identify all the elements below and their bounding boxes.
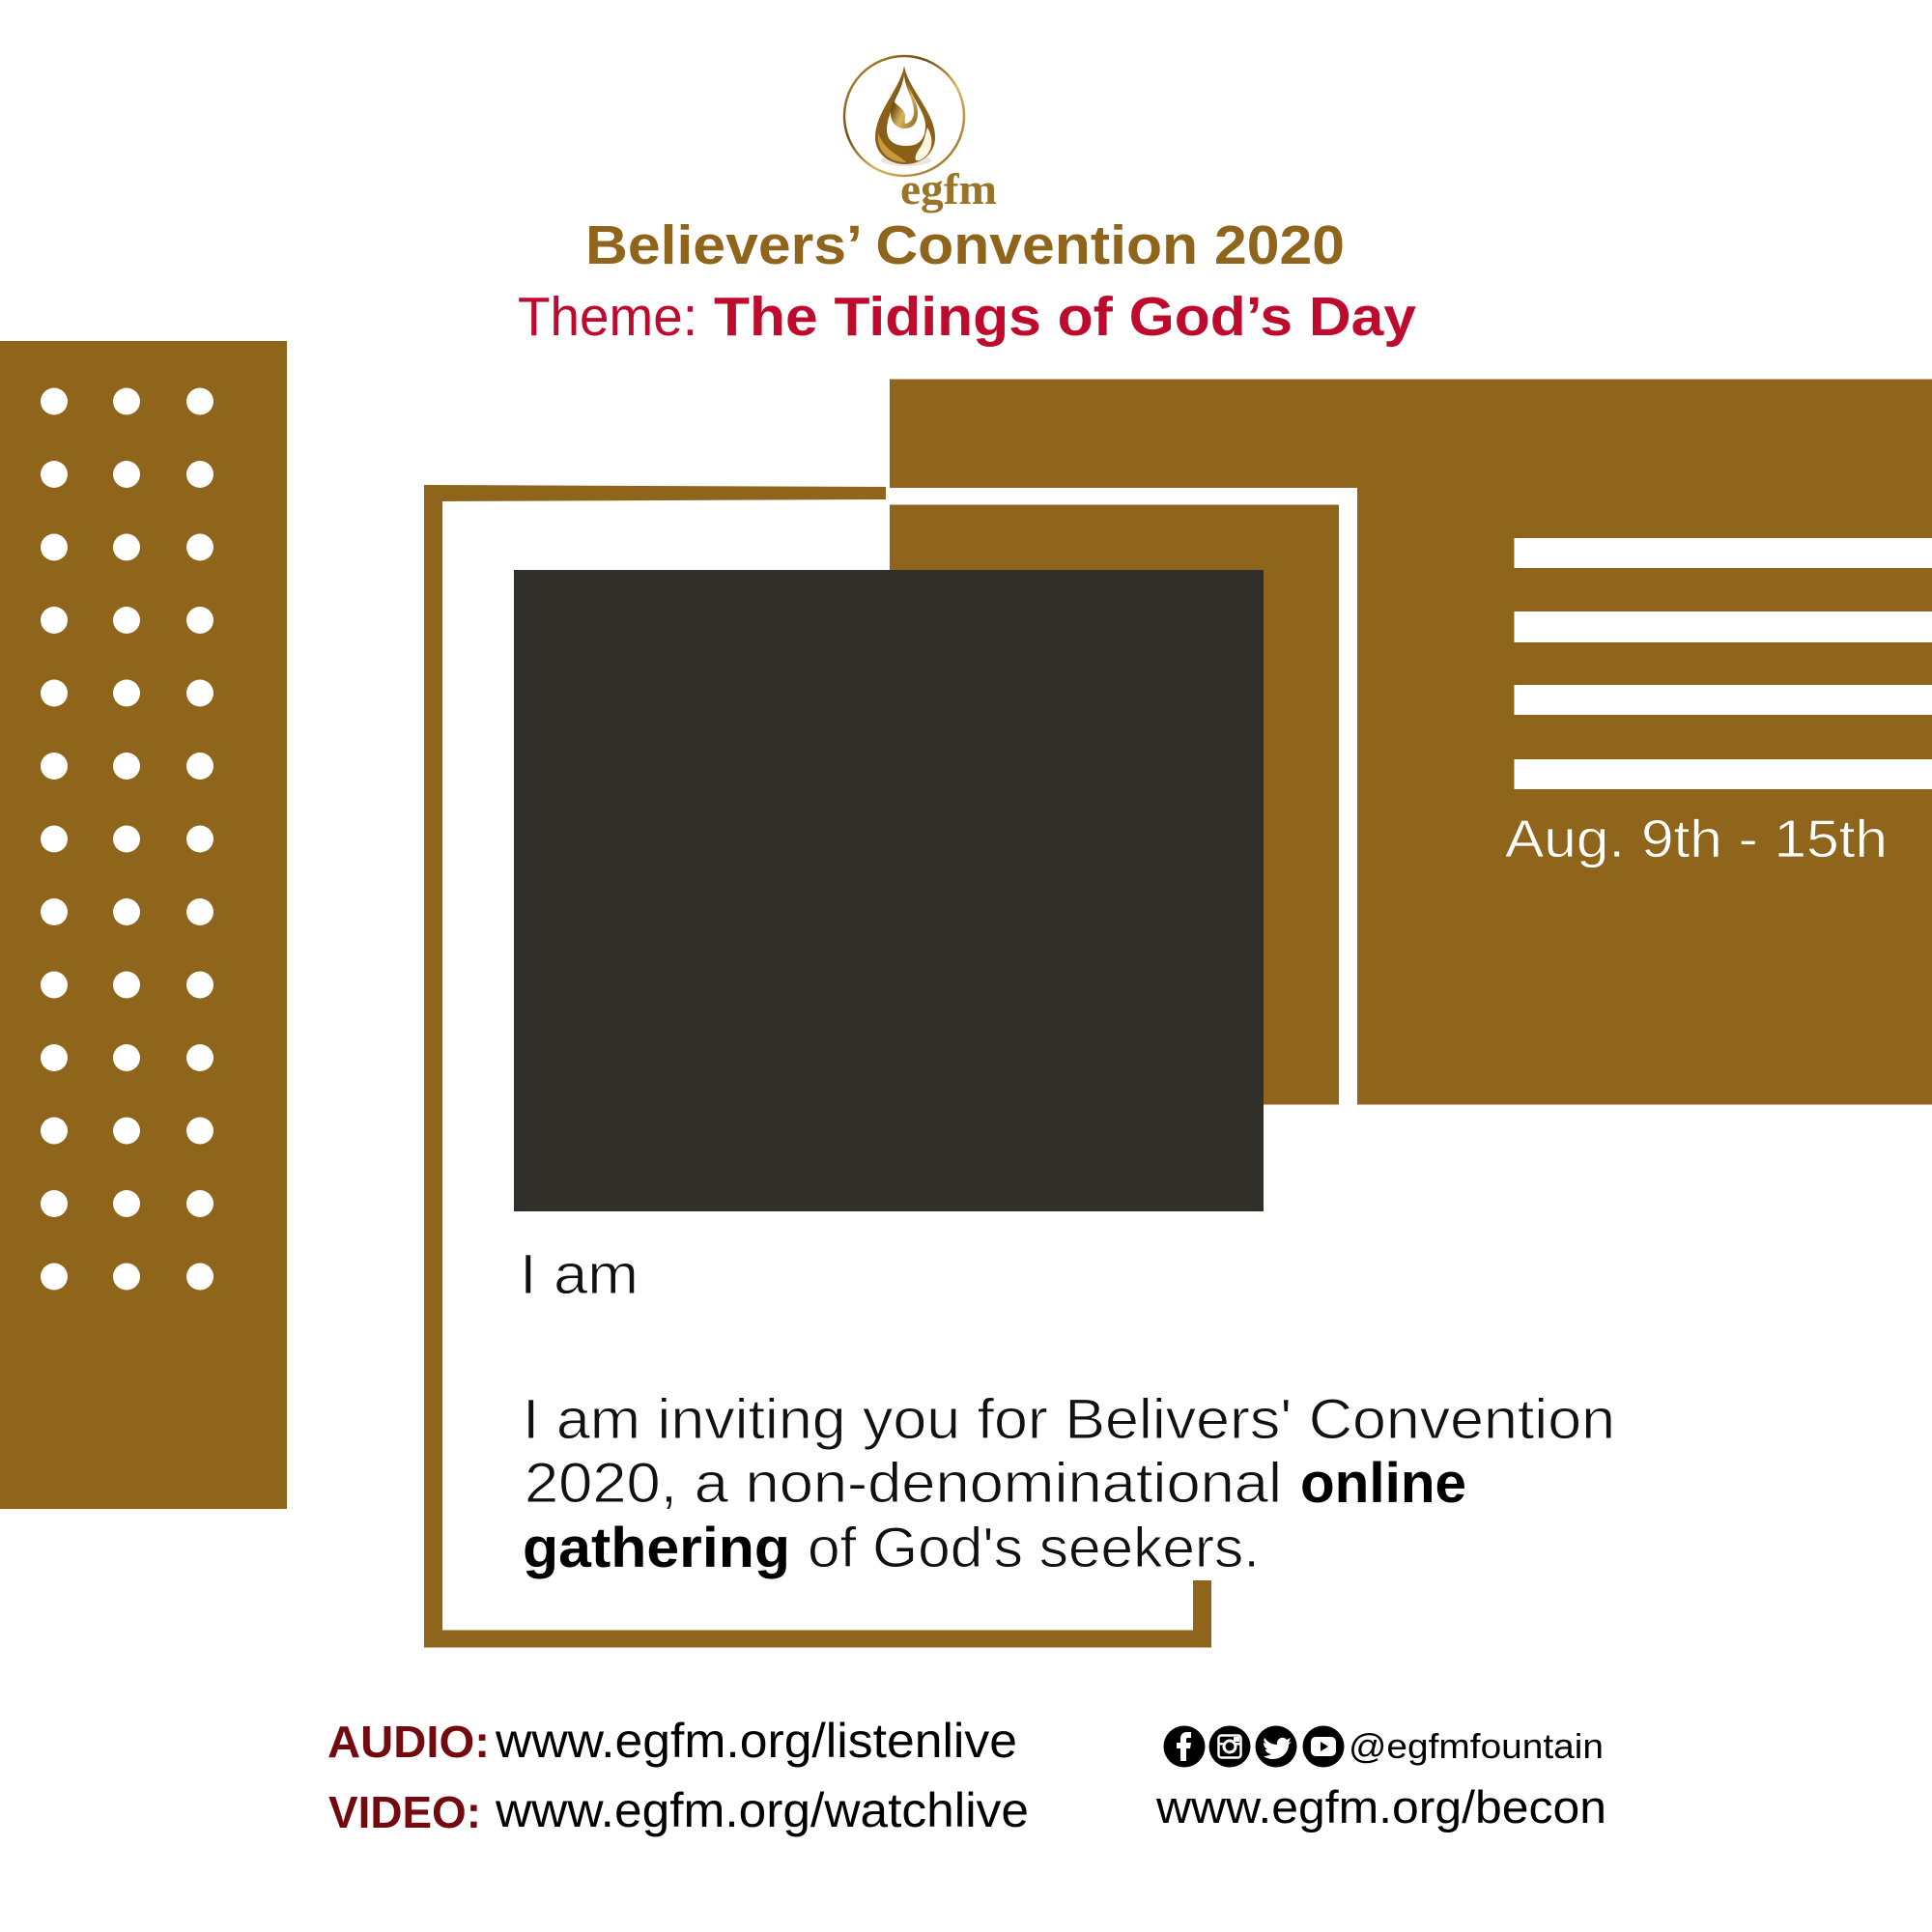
panel: left dotted column <box>0 341 287 1509</box>
name line: I am <box>520 1243 639 1306</box>
logo wordmark: egfm <box>900 164 997 213</box>
audio link: AUDIO: <box>327 1717 490 1767</box>
frame: brown outline <box>424 485 1211 1648</box>
invitation text: of God's seekers. <box>808 1517 1260 1579</box>
logo: egfm drop emblem <box>844 56 964 176</box>
icon: twitter <box>1256 1725 1296 1768</box>
video link: VIDEO: <box>328 1787 481 1837</box>
social handle: @egfmfountain <box>1349 1726 1604 1766</box>
invitation text: I am inviting you for Belivers' Convention <box>523 1388 1615 1451</box>
invitation text: gathering <box>523 1517 790 1579</box>
icon: instagram <box>1209 1725 1250 1768</box>
panel: right brown block with stripes and date <box>886 379 1932 1105</box>
icon: youtube <box>1302 1725 1345 1768</box>
panel: right brown block with stripes and date: Aug. 9th - 15th <box>1505 809 1888 868</box>
audio link: www.egfm.org/listenlive <box>495 1714 1017 1768</box>
video link: www.egfm.org/watchlive <box>495 1783 1029 1837</box>
theme line: Theme: <box>518 286 697 348</box>
title: Believers’ Convention 2020 <box>585 214 1345 276</box>
invitation text: online <box>1300 1452 1466 1515</box>
invitation text <box>523 1388 1615 1579</box>
invitation text: 2020, a non-denominational <box>525 1452 1282 1515</box>
icon: facebook <box>1163 1725 1206 1768</box>
social icons <box>1163 1725 1345 1768</box>
website link: www.egfm.org/becon <box>1155 1781 1606 1833</box>
photo placeholder <box>514 570 1264 1211</box>
theme line: The Tidings of God’s Day <box>714 286 1416 348</box>
